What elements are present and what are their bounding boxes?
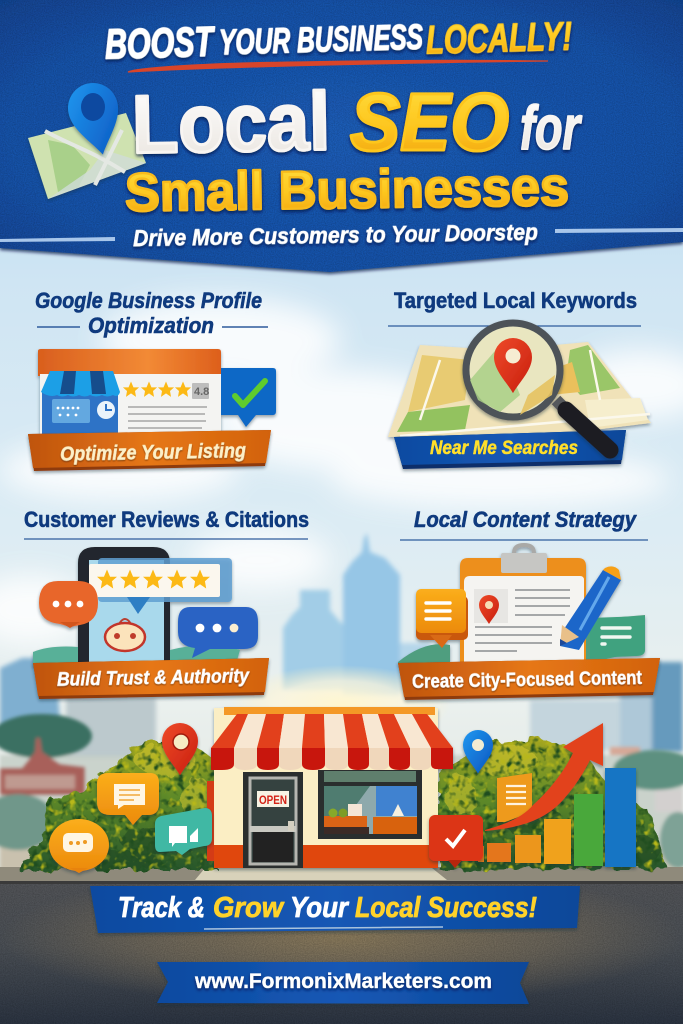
storefront (207, 707, 453, 868)
banner: Track & Grow Your Local Success: Grow (213, 892, 285, 924)
door with open sign: OPEN (259, 795, 287, 807)
subtitle: Drive More Customers to Your Doorstep (133, 219, 538, 251)
panel: Google Business Profile Optimization (28, 288, 276, 471)
icon: lock badge (105, 619, 145, 651)
illustration: phone with reviews (33, 547, 258, 666)
background: skyline (0, 533, 683, 870)
red underline swoosh (128, 60, 548, 72)
panel: Targeted Local Keywords (388, 288, 651, 469)
icon: phone (78, 547, 170, 665)
ribbon: Near Me Searches (394, 430, 626, 469)
ground: sidewalk and road (0, 867, 683, 1024)
icon: orange note (416, 589, 468, 648)
banner: website (157, 962, 529, 1004)
awning (211, 707, 453, 770)
icon: blue map pin small (463, 730, 493, 774)
illustration: clipboard (398, 545, 645, 664)
scene: bushes (18, 735, 668, 870)
icon: orange round bubble (49, 819, 109, 873)
top tagline (104, 8, 573, 72)
rating card (89, 558, 232, 614)
card illustration (38, 349, 276, 434)
main title: for (520, 94, 582, 163)
ribbon: Create City-Focused Content: Create City-Focused Content (412, 667, 643, 693)
rating 4.8: 4.8 (194, 386, 209, 398)
icon: magnifier with red pin (466, 323, 610, 450)
icon: four stars (123, 382, 191, 397)
icon: storefront (41, 371, 120, 434)
heading: Optimization (88, 313, 214, 338)
ribbon: Near Me Searches: Near Me Searches (430, 438, 578, 459)
clip (501, 545, 547, 573)
main title: Local (131, 76, 331, 171)
ribbon: Create City-Focused Content (398, 658, 660, 700)
main title: SEO (350, 77, 509, 168)
icon: folded map (28, 113, 146, 199)
bar chart (478, 768, 636, 867)
shop window (318, 770, 422, 839)
heading (35, 288, 268, 338)
heading: Local Content Strategy (414, 507, 638, 532)
banner: Track & Grow Your Local Success: Track & (118, 892, 205, 924)
banner: website: www.FormonixMarketers.com (194, 970, 492, 993)
icon: pencil (560, 566, 621, 650)
ribbon: Optimize Your Listing (28, 430, 271, 471)
rating 4.8 (192, 383, 209, 399)
main title (125, 76, 582, 223)
ribbon: Optimize Your Listing: Optimize Your Listing (60, 440, 246, 466)
icon: verified check badge (221, 368, 276, 427)
door with open sign (243, 772, 303, 868)
heading: Google Business Profile (35, 288, 262, 313)
panel: Customer Reviews & Citations (24, 507, 309, 699)
icon: orange speech bubble (39, 581, 98, 628)
top tagline: BOOST (104, 17, 216, 68)
banner: Track & Grow Your Local Success: Local Success! (355, 892, 537, 924)
icon: red map pin (162, 723, 198, 775)
arrow: growth (485, 723, 603, 831)
ribbon: Build Trust & Authority (33, 658, 269, 699)
icon: blue map pin (63, 78, 127, 160)
header banner (0, 0, 683, 272)
banner: Track & Grow Your Local Success: Your (290, 892, 350, 924)
background: clouds (0, 298, 683, 645)
heading: Targeted Local Keywords (394, 288, 637, 313)
icon: orange message bubble (97, 773, 159, 825)
icon: red pin (479, 595, 499, 624)
top tagline: LOCALLY! (425, 15, 573, 63)
icon: orange document tag (497, 773, 532, 822)
icon: red check badge (429, 815, 483, 868)
heading: Customer Reviews & Citations (24, 507, 309, 532)
banner: Track & Grow Your Local Success (90, 886, 580, 933)
ribbon: Build Trust & Authority: Build Trust & Authority (57, 665, 250, 691)
main title: Small Businesses (125, 157, 569, 223)
top tagline: YOUR BUSINESS (218, 18, 423, 62)
icon: teal video bubble (155, 808, 212, 855)
panel: Local Content Strategy (398, 507, 660, 700)
icon: blue speech bubble (178, 607, 258, 658)
illustration: city map (388, 342, 651, 437)
icon: green note (590, 616, 645, 658)
